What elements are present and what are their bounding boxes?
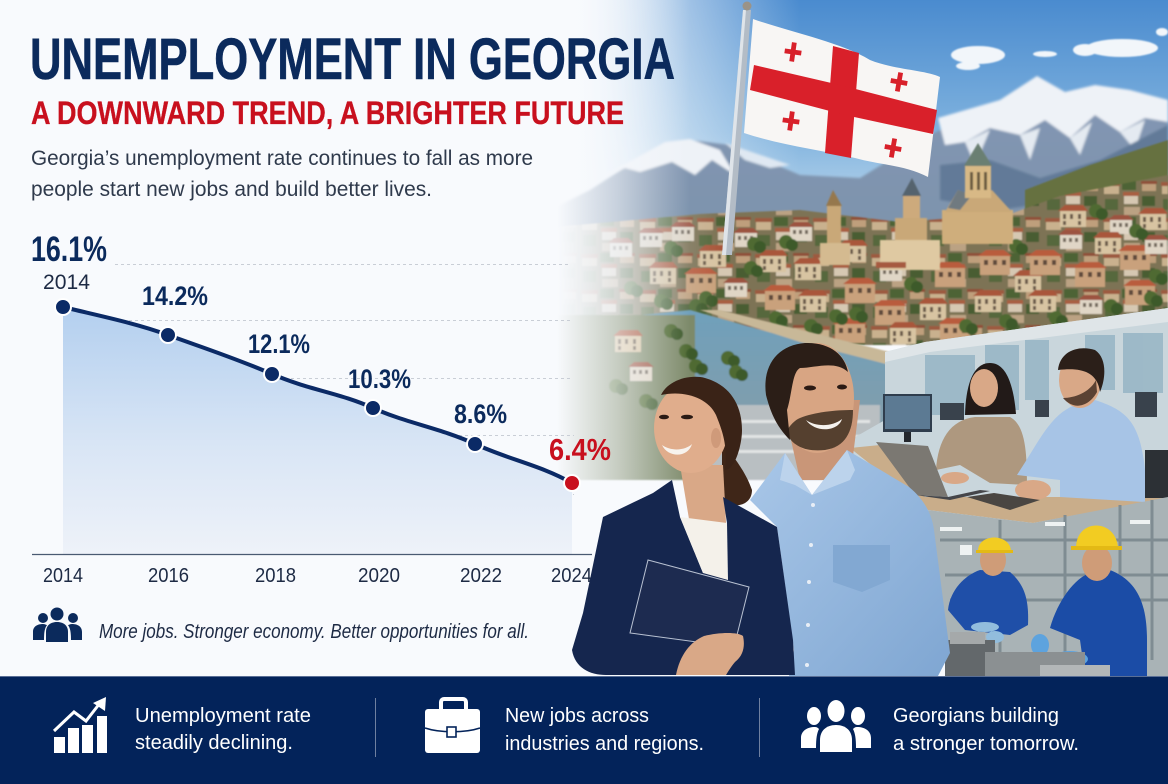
- laptops: [876, 442, 1040, 510]
- first year label: 2014: [43, 271, 90, 294]
- icon: group of people: [801, 700, 871, 752]
- feature text 3: a stronger tomorrow.: [893, 733, 1079, 755]
- axis year labels: 2020: [358, 565, 400, 587]
- line chart: [31, 230, 611, 587]
- feature text 3: [893, 705, 1079, 755]
- Georgian flag: [744, 19, 940, 177]
- worker right: [1031, 526, 1147, 676]
- subtitle: A DOWNWARD TREND, A BRIGHTER FUTURE: [31, 95, 624, 131]
- feature text 1: Unemployment rate: [135, 705, 311, 727]
- axis year labels: 2016: [148, 565, 189, 587]
- office scene: [850, 308, 1168, 523]
- hillside city: [500, 175, 1168, 345]
- clouds: [951, 28, 1168, 70]
- fade to page: [470, 0, 690, 676]
- flagpole: [722, 2, 752, 255]
- sky: [500, 0, 1168, 240]
- woman: [572, 377, 795, 675]
- title: UNEMPLOYMENT IN GEORGIA: [30, 27, 675, 92]
- foreground couple: [572, 343, 950, 676]
- icon: rising chart: [54, 697, 107, 753]
- hand: [676, 633, 744, 675]
- feature text 2: industries and regions.: [505, 733, 704, 755]
- value labels: 8.6%: [454, 399, 507, 429]
- feature text 2: [505, 705, 704, 755]
- value labels: [31, 230, 611, 467]
- man: [750, 343, 950, 676]
- photo collage: [470, 0, 1168, 676]
- worker left: [948, 538, 1028, 643]
- tagline: More jobs. Stronger economy. Better opportunities for all.: [99, 621, 529, 643]
- value labels: 12.1%: [248, 329, 310, 359]
- value labels: 10.3%: [348, 364, 411, 394]
- icon: people: [33, 608, 82, 642]
- feature text 2: New jobs across: [505, 705, 649, 727]
- intro text: people start new jobs and build better lives.: [31, 178, 432, 201]
- axis year labels: 2022: [460, 565, 502, 587]
- axis year labels: 2018: [255, 565, 296, 587]
- trend line: [63, 307, 572, 483]
- area under line: [63, 307, 572, 554]
- intro text: [31, 147, 533, 201]
- folder: [630, 560, 749, 647]
- icon: briefcase: [425, 699, 480, 753]
- mountains: [540, 76, 1168, 240]
- desk: [850, 445, 1168, 523]
- river and lower town: [500, 310, 890, 480]
- monitor: [883, 394, 932, 442]
- intro text: Georgia’s unemployment rate continues to fall as more: [31, 147, 533, 170]
- value labels: 14.2%: [142, 281, 208, 311]
- axis year labels: 2024: [551, 565, 592, 587]
- cathedral: [820, 143, 1013, 270]
- office man: [1015, 348, 1145, 502]
- feature text 1: steadily declining.: [135, 732, 293, 754]
- axis year labels: 2014: [43, 565, 83, 587]
- bottom band: [0, 676, 1168, 784]
- factory scene: [928, 497, 1168, 676]
- axis year labels: [43, 565, 592, 587]
- value labels: 6.4%: [549, 432, 611, 467]
- machinery: [945, 632, 1110, 676]
- feature text 1: [135, 705, 311, 754]
- axis line: [32, 554, 592, 556]
- green hillside: [1025, 140, 1168, 240]
- feature text 3: Georgians building: [893, 705, 1059, 727]
- value labels: 16.1%: [31, 230, 107, 269]
- office woman: [936, 363, 1027, 485]
- data points: [55, 299, 580, 491]
